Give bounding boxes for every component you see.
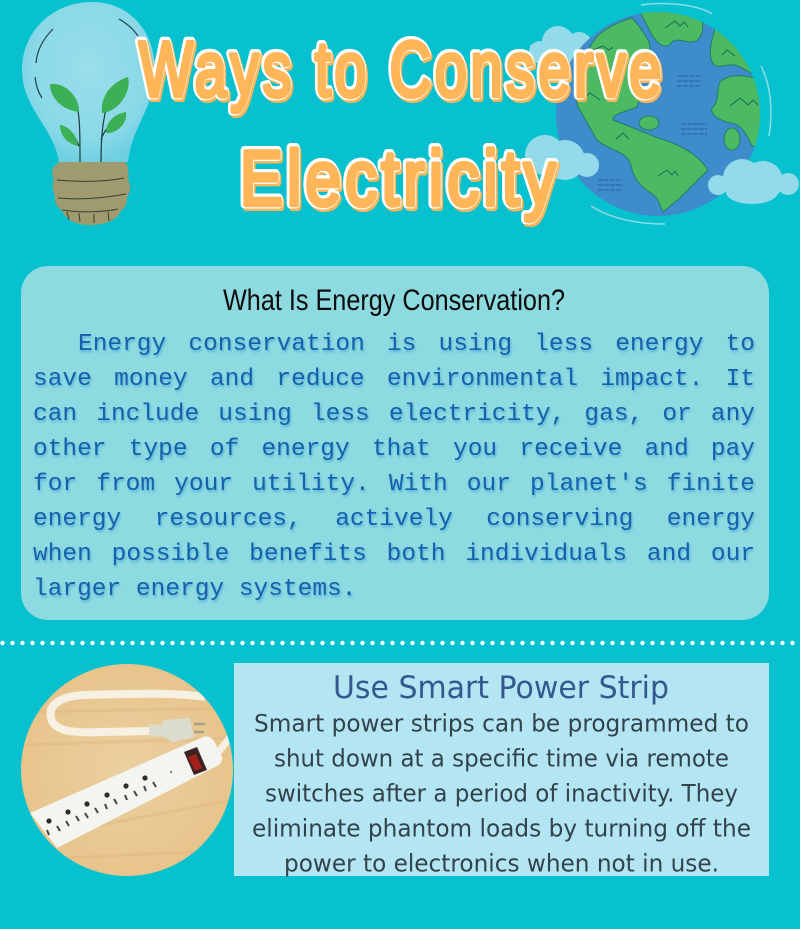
panel: what is energy conservation — [21, 266, 769, 620]
text block: smart power strip description — [252, 710, 751, 878]
dotted divider — [2, 641, 800, 645]
text block: smart power strip description: eliminate phantom loads by turning off the — [252, 814, 751, 842]
heading: use smart power strip: Use Smart Power Strip — [333, 670, 669, 706]
text block: energy conservation body: for from your utility. With our planet's finite — [33, 471, 755, 498]
power cord — [51, 694, 205, 732]
icon: planet earth — [556, 4, 775, 224]
title line: Electricity: Electricity — [241, 136, 561, 224]
text block: smart power strip description: Smart power strips can be programmed to — [254, 710, 749, 738]
panel: use smart power strip — [234, 663, 769, 876]
text block: energy conservation body: other type of energy that you receive and pay — [33, 436, 755, 463]
icon: clouds in front of the planet — [523, 135, 799, 204]
photo: power strip on wood — [21, 664, 233, 876]
text block: smart power strip description: switches after a period of inactivity. They — [265, 780, 738, 808]
text block: energy conservation body: larger energy systems. — [33, 576, 356, 603]
text block: smart power strip description: shut down at a specific time via remote — [274, 744, 729, 772]
title line: Electricity: Electricity — [239, 133, 559, 221]
power switch — [184, 747, 207, 775]
text block: energy conservation body — [33, 331, 756, 603]
text block: energy conservation body: energy resources, actively conserving energy — [33, 506, 755, 533]
heading: what is energy conservation: What Is Energy Conservation? — [223, 284, 565, 317]
title — [138, 24, 666, 224]
icon: light bulb with plant — [22, 2, 155, 225]
icon: clouds behind the planet — [529, 26, 592, 63]
text block: energy conservation body: when possible benefits both individuals and our — [33, 541, 755, 568]
plug — [149, 718, 194, 742]
text block: energy conservation body: save money and reduce environmental impact. It — [33, 366, 755, 393]
title line: Electricity: Electricity — [240, 134, 560, 222]
text block: energy conservation body: Energy conservation is using less energy to — [78, 331, 755, 358]
text block: smart power strip description: power to electronics when not in use. — [284, 850, 719, 878]
text block: energy conservation body: can include using less electricity, gas, or any — [33, 401, 755, 428]
strip body — [30, 736, 222, 848]
